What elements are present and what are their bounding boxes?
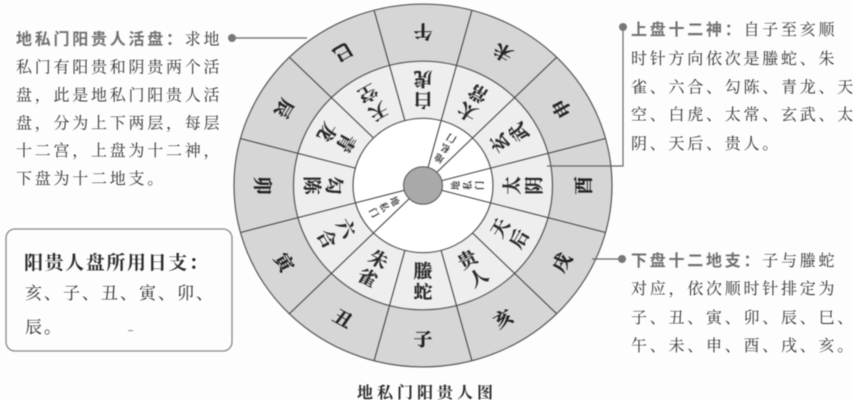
body: 阴、天后、贵人。: [631, 131, 781, 154]
branch labels: 辰: [268, 94, 301, 123]
deity labels: 太: [498, 176, 525, 195]
callout body: 私门有阳贵和阴贵两个活: [16, 54, 222, 78]
spokes: [240, 10, 606, 361]
deity labels: 白: [414, 88, 432, 113]
branch labels: 戌: [545, 248, 578, 277]
callout heading line: 地私门阳贵人活盘：求地: [16, 26, 222, 50]
heading line: 下盘十二地支：子与螣蛇: [631, 247, 837, 271]
deity labels: 天: [364, 96, 394, 128]
branch labels: [250, 19, 596, 352]
deity labels: 陈: [299, 176, 326, 196]
body: 时针方向依次是螣蛇、朱: [631, 46, 837, 69]
deity labels: 朱: [364, 243, 394, 275]
deity labels: 螣: [414, 258, 433, 283]
body: 雀、六合、勾陈、青龙、天: [631, 74, 853, 98]
upper right callout: [547, 16, 853, 166]
box heading: 阳贵人盘所用日支：: [24, 248, 209, 275]
inner wedge labels: 地: [387, 193, 404, 209]
outer ring: earthly branches: [234, 4, 612, 367]
box list: 亥、子、丑、寅、卯、: [25, 279, 215, 304]
deity labels: 合: [311, 224, 344, 253]
branch labels: 亥: [488, 303, 518, 334]
branch labels: 午: [414, 19, 432, 45]
deity labels: 太: [452, 96, 482, 128]
deity labels: 虎: [413, 67, 432, 92]
branch labels: 未: [488, 37, 518, 68]
deity labels: 天: [483, 213, 516, 242]
deity labels: 后: [502, 224, 535, 253]
inner wedge labels: 私: [460, 180, 474, 190]
callout body: 下盘为十二地支。: [16, 166, 166, 189]
body: 子、丑、寅、卯、辰、巳、: [631, 305, 853, 328]
branch labels: 丑: [328, 303, 358, 334]
branch labels: 卯: [250, 176, 276, 195]
center hub: [404, 167, 442, 204]
deity labels: 雀: [353, 262, 384, 294]
deity labels: 六: [330, 214, 363, 243]
deity labels: 贵: [452, 242, 484, 275]
deity labels: 阴: [520, 176, 547, 195]
inner disc: [353, 118, 493, 253]
connector with dot: [592, 255, 626, 263]
inner wedge labels: 门: [472, 181, 486, 190]
inner wedge labels: 私: [376, 199, 394, 215]
body: 对应，依次顺时针排定为: [631, 276, 837, 299]
callout body: 盘，分为上下两层，每层: [16, 110, 222, 134]
left callout text: [16, 26, 222, 189]
branch labels: 寅: [268, 248, 302, 279]
lower right callout: [592, 247, 853, 356]
deity labels: [299, 67, 547, 304]
inner wedge labels: 门: [366, 205, 383, 220]
inner wedge labels: 地: [448, 180, 462, 190]
small mark: [128, 330, 133, 331]
body: [631, 46, 853, 154]
heading line: 上盘十二神：自子至亥顺: [631, 16, 837, 40]
branch labels: 子: [414, 326, 432, 352]
callout body: 盘，此是地私门阳贵人活: [16, 82, 222, 106]
inner wedge labels: 门: [443, 131, 459, 147]
deity labels: 空: [353, 78, 383, 109]
inner wedge labels: 私: [437, 140, 453, 157]
connector with dot: [547, 23, 627, 166]
branch labels: 巳: [328, 37, 358, 68]
left connector with dot: [228, 34, 307, 42]
callout body: 十二宫，上盘为十二神，: [16, 138, 222, 161]
deity labels: 蛇: [414, 279, 433, 304]
body: [631, 276, 853, 356]
wheel diagram: [234, 4, 612, 367]
deity labels: 玄: [483, 128, 516, 157]
rounded info box: [6, 229, 232, 351]
deity labels: 武: [502, 118, 535, 147]
branch labels: 酉: [570, 176, 596, 195]
deity labels: 常: [463, 78, 493, 109]
box list last line: 辰。: [25, 313, 63, 338]
middle ring: twelve deities: [294, 61, 552, 310]
deity labels: 人: [463, 262, 493, 293]
callout body: [16, 54, 222, 189]
inner wedge labels: [366, 130, 486, 220]
branch labels: 申: [545, 94, 578, 123]
deity labels: 龙: [311, 118, 344, 147]
deity labels: 青: [330, 129, 363, 157]
deity labels: 勾: [321, 176, 348, 195]
body: 午、未、申、酉、戌、亥。: [631, 333, 853, 356]
inner wedge labels: 地: [431, 150, 447, 167]
body: 空、白虎、太常、玄武、太: [631, 102, 853, 125]
